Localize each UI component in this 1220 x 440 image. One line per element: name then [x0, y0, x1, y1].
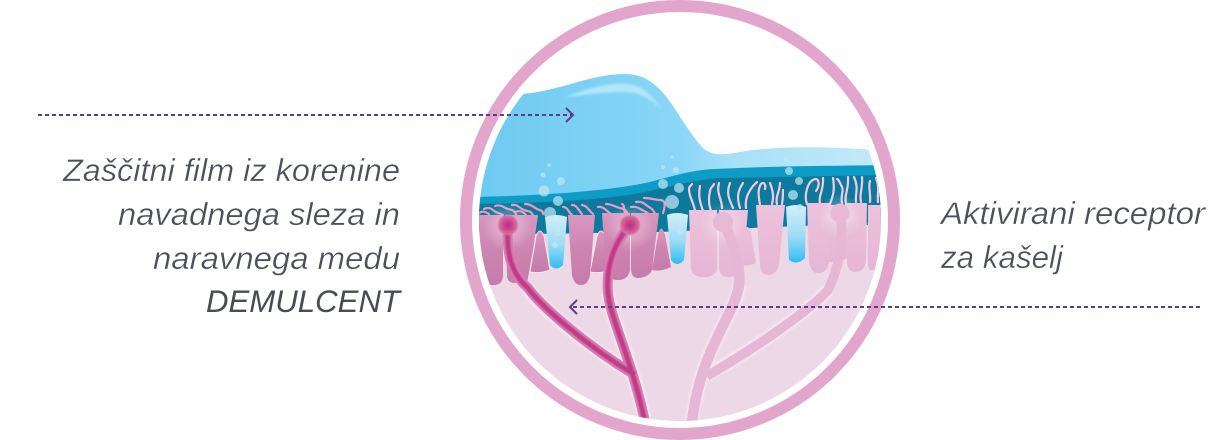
right text block: [939, 195, 1207, 275]
right text block: Aktivirani receptor: [939, 195, 1207, 231]
left cilia: [478, 198, 665, 215]
protective film: [470, 74, 890, 205]
dark nerve: [508, 225, 645, 422]
right cilia: [689, 177, 878, 211]
left text block: Zaščitni film iz korenine: [62, 152, 400, 188]
left text block: [62, 152, 403, 319]
left text block: DEMULCENT: [206, 283, 403, 319]
arrow: to cough receptor: [570, 300, 1200, 314]
cell glow around nerve heads: [488, 196, 855, 248]
illustration: cross-section of throat mucosa: [466, 6, 894, 434]
bubbles: [538, 156, 803, 248]
left text block: naravnega medu: [153, 240, 400, 276]
film highlight: [565, 84, 662, 110]
pink ring: [466, 6, 894, 434]
light pink cells: [689, 203, 890, 277]
nerve heads: [498, 204, 850, 235]
mucus band: [470, 165, 890, 225]
right text block: za kašelj: [940, 239, 1064, 275]
blue cells: [545, 205, 806, 268]
dark mucus layer: [470, 175, 890, 235]
arrow: to protective film: [38, 108, 573, 122]
left text block: navadnega sleza in: [118, 196, 400, 232]
tissue background: [470, 190, 890, 430]
nerve halo: [527, 285, 828, 420]
light nerve: [692, 213, 842, 422]
dark pink cells: [470, 213, 671, 285]
